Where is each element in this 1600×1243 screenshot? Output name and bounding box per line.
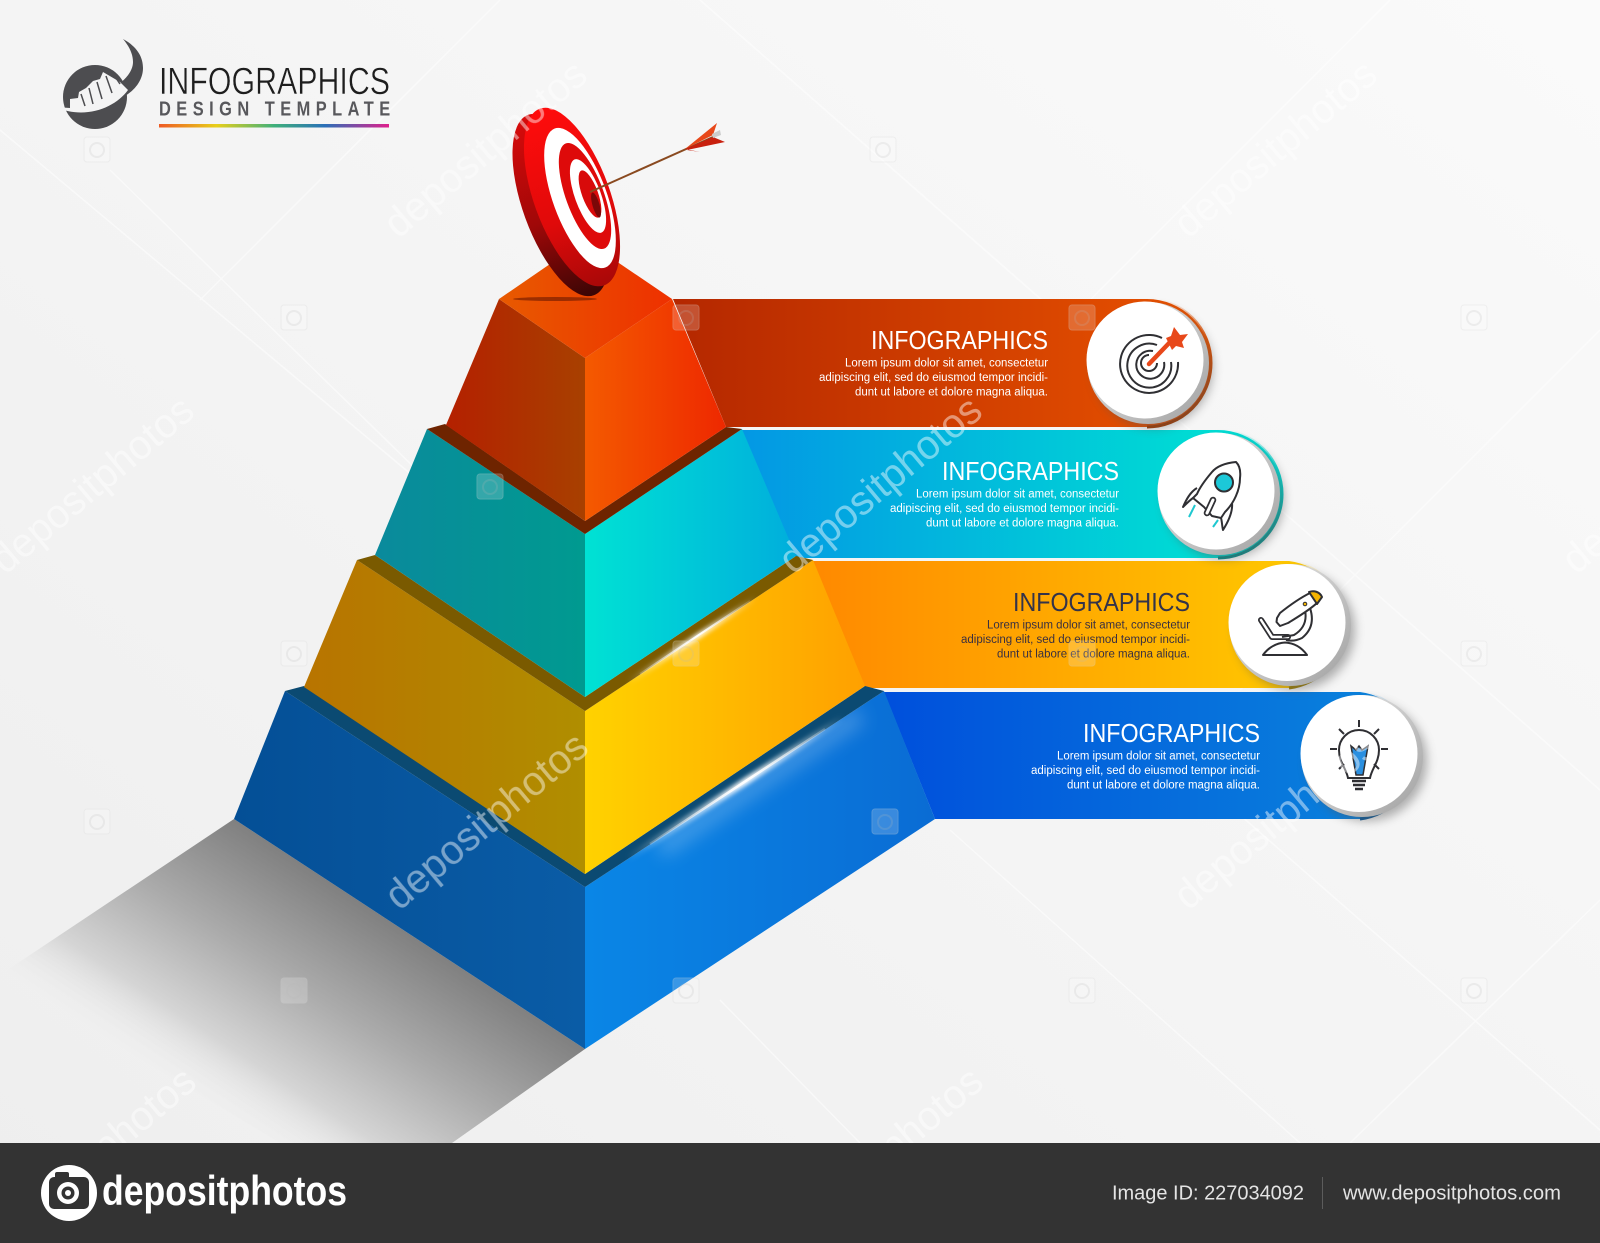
heading: INFOGRAPHICS	[871, 325, 1048, 355]
ribbon: red	[673, 299, 1211, 427]
watermark text: depositphotos	[769, 386, 991, 582]
circle badge	[1228, 564, 1355, 690]
body text: Lorem ipsum dolor sit amet, consectetur	[987, 620, 1190, 632]
tier: yellow	[304, 560, 865, 874]
target rings	[529, 119, 631, 277]
body text: dunt ut labore et dolore magna aliqua.	[926, 518, 1119, 530]
logo title: INFOGRAPHICS	[159, 61, 390, 103]
body text: dunt ut labore et dolore magna aliqua.	[855, 386, 1048, 398]
panel: step 2 cyan	[890, 432, 1284, 559]
ribbon: cyan	[742, 430, 1282, 558]
body text: Lorem ipsum dolor sit amet, consectetur	[845, 358, 1048, 370]
icon: microscope	[1261, 591, 1322, 655]
heading: INFOGRAPHICS	[942, 456, 1119, 486]
target face	[504, 96, 640, 298]
body text: adipiscing elit, sed do eiusmod tempor incidi-	[961, 634, 1190, 646]
logo icon	[55, 39, 143, 129]
target on top of pyramid	[492, 96, 725, 308]
body text: Lorem ipsum dolor sit amet, consectetur	[916, 488, 1119, 500]
panel: step 4 blue	[1031, 695, 1427, 821]
body text	[819, 358, 1048, 398]
panel: step 1 red	[819, 302, 1213, 428]
target shadow	[513, 297, 597, 301]
logo subtitle: DESIGN TEMPLATE	[159, 97, 390, 120]
separator	[1322, 1177, 1323, 1209]
body text: adipiscing elit, sed do eiusmod tempor incidi-	[890, 503, 1119, 515]
body text: adipiscing elit, sed do eiusmod tempor incidi-	[819, 372, 1048, 384]
tier: red top	[446, 240, 726, 521]
footer logo	[41, 1165, 347, 1221]
tier ledge: red	[427, 424, 742, 534]
heading: INFOGRAPHICS	[1013, 587, 1190, 617]
circle badge	[1300, 695, 1427, 821]
website url: www.depositphotos.com	[1342, 1182, 1561, 1204]
tier ledge: blue	[285, 686, 884, 887]
watermark camera marks	[84, 137, 1487, 1003]
body text	[890, 488, 1119, 530]
light streak: blue ledge	[627, 717, 844, 859]
wordmark: depositphotos	[102, 1167, 347, 1214]
ribbon: yellow	[813, 561, 1345, 688]
arrow	[590, 123, 725, 192]
footer bar	[0, 1143, 1600, 1243]
body text	[961, 620, 1190, 660]
image id: Image ID: 227034092	[1112, 1182, 1304, 1204]
body text: dunt ut labore et dolore magna aliqua.	[997, 648, 1190, 660]
camera badge	[41, 1165, 97, 1221]
tier: teal	[375, 429, 796, 697]
circle badge	[1158, 432, 1284, 559]
tier ledge: yellow	[357, 555, 813, 711]
tier: blue base	[234, 691, 935, 1049]
body text	[1031, 750, 1260, 792]
body text: adipiscing elit, sed do eiusmod tempor incidi-	[1031, 765, 1260, 777]
watermark text: depositphotos	[1164, 50, 1386, 246]
target side rim	[492, 102, 630, 308]
circle badge	[1086, 302, 1213, 428]
light streak: yellow ledge	[627, 597, 757, 683]
ribbon: blue	[884, 692, 1416, 819]
panel: step 3 yellow	[961, 564, 1355, 690]
watermark text: depositphotos	[374, 50, 596, 246]
logo: infographics design template	[55, 39, 390, 129]
icon: light bulb	[1330, 720, 1388, 789]
heading: INFOGRAPHICS	[1083, 718, 1260, 748]
body text: dunt ut labore et dolore magna aliqua.	[1067, 780, 1260, 792]
icon: rocket	[1183, 462, 1240, 530]
body text: Lorem ipsum dolor sit amet, consectetur	[1057, 750, 1260, 762]
watermark text: depositphotos	[375, 722, 597, 918]
watermark text: depositphotos	[1164, 722, 1386, 918]
icon: target with arrow	[1120, 327, 1188, 393]
pyramid	[234, 240, 935, 1049]
rainbow bar	[159, 124, 389, 128]
pyramid cast shadow	[0, 819, 585, 1143]
